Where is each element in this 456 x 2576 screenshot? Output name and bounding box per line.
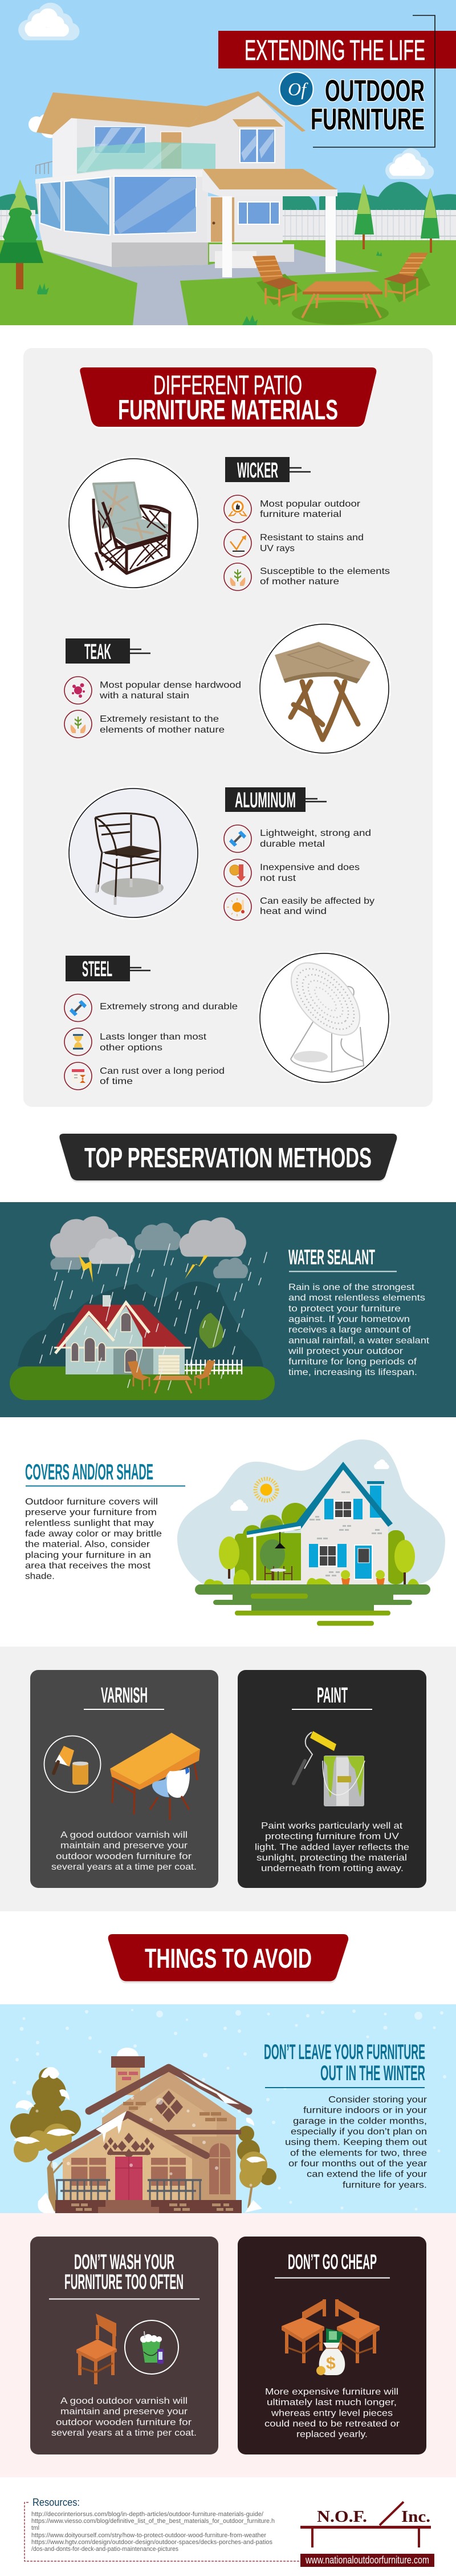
text: cheap: whereas entry level pieces xyxy=(271,2408,393,2418)
bullet: extremely strong xyxy=(64,994,238,1021)
photo: steel chair xyxy=(258,951,391,1085)
illustration: orange desk and chair xyxy=(110,1733,200,1820)
icon: cloud top-left xyxy=(18,3,79,41)
bullet: most popular xyxy=(224,495,361,523)
heading banner: materials: DIFFERENT PATIO xyxy=(153,370,302,400)
background hills and fence xyxy=(0,182,456,241)
text: water sealant body: will protect your outdoor xyxy=(288,1346,404,1356)
material label: aluminum: ALUMINUM xyxy=(235,788,296,812)
text: water sealant body: to protect your furniture xyxy=(288,1304,401,1313)
text: cheap: More expensive furniture will xyxy=(265,2387,398,2397)
card: varnish xyxy=(30,1670,218,1888)
text: winter body: furniture for years. xyxy=(343,2180,427,2190)
bullet: lightweight: durable metal xyxy=(260,839,325,849)
icon: trees xyxy=(0,180,439,325)
text: paint: Paint works particularly well at xyxy=(261,1821,403,1831)
bullet: most popular: furniture material xyxy=(260,509,341,519)
bullet: lasts longer xyxy=(64,1028,207,1056)
text: winter body: of the elements for two, three xyxy=(290,2148,427,2158)
card: paint: PAINT xyxy=(317,1684,348,1708)
bullet: resistant to elements: elements of mother nature xyxy=(100,725,225,735)
illustration: chair xyxy=(76,2314,117,2384)
text: water sealant body: receives a large amount of xyxy=(288,1325,412,1335)
ground and path xyxy=(0,240,456,325)
panel: water sealant xyxy=(0,1202,456,1417)
bullet: inexpensive: Inexpensive and does xyxy=(260,863,360,872)
source links: tml xyxy=(31,2525,39,2531)
section: covers and shade xyxy=(25,1439,445,1626)
icon: hourglass xyxy=(73,1035,83,1049)
illustration: snowy house xyxy=(10,2048,276,2214)
bullet: susceptible: of mother nature xyxy=(260,577,339,587)
snowfall xyxy=(13,2009,446,2210)
icon: sun and thermometer xyxy=(227,898,245,916)
logo: N.O.F. Inc.: Inc. xyxy=(401,2508,430,2526)
illustration: paint can and roller xyxy=(294,1731,365,1806)
icon: hands with sprout xyxy=(71,717,85,733)
text: winter body: furniture indoors or in your xyxy=(303,2106,427,2116)
photo: teak stool xyxy=(258,622,391,755)
icon: hands with sprout xyxy=(230,569,245,586)
text: covers body: relentless sunlight that may xyxy=(25,1518,154,1528)
bullet: susceptible xyxy=(224,563,390,591)
text: varnish: maintain and preserve your xyxy=(60,1841,188,1851)
photo: aluminum chair xyxy=(67,786,200,920)
patio furniture xyxy=(253,253,430,325)
panel: don't leave furniture out in winter xyxy=(0,2004,456,2214)
source links: https://www.hgtv.com/design/outdoor-design/outdoor-spaces/decks-porches-and-patios xyxy=(31,2539,272,2546)
text: covers body: shade. xyxy=(25,1572,55,1582)
bullet: lightweight: Lightweight, strong and xyxy=(260,828,371,838)
source links: http://decorinteriorsus.com/blog/in-depth-articles/outdoor-furniture-materials-guide/ xyxy=(31,2511,264,2518)
heading banner: things to avoid: THINGS TO AVOID xyxy=(145,1944,312,1974)
text: winter body: using them. Keeping them out xyxy=(285,2138,427,2148)
text: water sealant body: furniture for long periods of xyxy=(288,1357,417,1367)
text: wash: maintain and preserve your xyxy=(60,2407,188,2417)
bullet: resistant to elements xyxy=(64,710,225,738)
illustration: chairs and money bag xyxy=(282,2299,380,2375)
bullet: heat and wind: Can easily be affected by xyxy=(260,896,374,906)
text: paint xyxy=(255,1821,409,1874)
source links xyxy=(31,2511,275,2553)
heading banner: materials: FURNITURE MATERIALS xyxy=(118,395,338,426)
text: water sealant body: against. If your hometown xyxy=(288,1315,410,1324)
text: winter body: especially if you don’t plan on xyxy=(291,2127,427,2137)
material label: steel: STEEL xyxy=(82,957,112,981)
text: covers body: area that receives the most xyxy=(25,1561,151,1571)
title badge: Of: Of xyxy=(288,79,308,99)
text: water sealant body: Rain is one of the strongest xyxy=(288,1283,415,1292)
icon: dumbbell xyxy=(70,1000,87,1016)
text: paint: light. The added layer reflects the xyxy=(255,1842,409,1852)
heading banner: things to avoid xyxy=(108,1934,348,1983)
bullet: heat and wind: heat and wind xyxy=(260,907,327,916)
house xyxy=(35,91,337,277)
heading: resources: Resources: xyxy=(32,2497,80,2508)
icon: coin and down arrow xyxy=(230,864,246,881)
text: cheap: ultimately last much longer, xyxy=(267,2398,397,2408)
card: paint xyxy=(238,1670,426,1888)
card: varnish: VARNISH xyxy=(101,1684,148,1708)
heading banner: top preservation methods xyxy=(59,1134,397,1182)
card: don't wash too often xyxy=(30,2237,218,2454)
illustration: house with sun xyxy=(177,1439,445,1626)
icon: bucket in circle xyxy=(125,2320,178,2374)
icon: award xyxy=(229,502,246,516)
title banner xyxy=(218,15,456,147)
material label: teak: TEAK xyxy=(84,640,111,664)
bullet: lasts longer: other options xyxy=(100,1043,162,1053)
heading banner: materials xyxy=(80,367,376,428)
illustration: chairs and money bag: $ xyxy=(326,2354,336,2373)
footer: resources xyxy=(25,2497,300,2561)
text: varnish xyxy=(51,1830,197,1872)
panel: washing and buying cheap xyxy=(0,2213,456,2477)
text: water sealant body: time, increasing its lifespan. xyxy=(288,1368,417,1377)
text: covers body xyxy=(25,1497,162,1582)
bullet: susceptible: Susceptible to the elements xyxy=(260,567,390,576)
text: winter body xyxy=(285,2095,427,2190)
bullet: resistant xyxy=(224,529,364,557)
bullet: can rust xyxy=(64,1062,225,1090)
source links: https://www.doityourself.com/stry/how-to-protect-outdoor-wood-furniture-from-weather xyxy=(31,2532,266,2539)
source links: https://www.viesso.com/blog/definitive_list_of_the_best_materials_for_outdoor_furniture.h xyxy=(31,2518,275,2525)
icon: dumbbell xyxy=(229,831,246,847)
text: wash: outdoor wooden furniture for xyxy=(56,2417,192,2427)
card: don't go cheap xyxy=(238,2237,426,2454)
material label: teak xyxy=(66,638,150,664)
material label: aluminum xyxy=(225,787,327,812)
bullet: resistant: Resistant to stains and xyxy=(260,533,364,543)
icon: brush and can in circle xyxy=(44,1736,100,1793)
text: cheap: replaced yearly. xyxy=(296,2430,368,2440)
text: varnish: outdoor wooden furniture for xyxy=(56,1851,192,1861)
material label: wicker: WICKER xyxy=(237,459,278,483)
bullet: lightweight xyxy=(224,825,371,852)
material label: wicker xyxy=(225,457,311,483)
bullet: inexpensive xyxy=(224,859,360,887)
hero illustration xyxy=(0,0,456,325)
text: wash xyxy=(51,2396,197,2438)
bracket xyxy=(313,15,435,147)
text: winter body: can extend the life of your xyxy=(307,2170,427,2179)
bullet: can rust: of time xyxy=(100,1077,133,1086)
text: wash: A good outdoor varnish will xyxy=(60,2396,188,2406)
text: paint: underneath from rotting away. xyxy=(261,1864,404,1874)
heading: don't leave furniture xyxy=(264,2040,425,2088)
photo: wicker chair xyxy=(67,456,200,590)
text: winter body: or four months out of the year xyxy=(288,2159,427,2169)
text: varnish: A good outdoor varnish will xyxy=(60,1830,188,1840)
logo: N.O.F. Inc.: www.nationaloutdoorfurniture.com xyxy=(305,2554,429,2566)
text: winter body: Consider storing your xyxy=(328,2095,427,2105)
panel: patio furniture materials xyxy=(23,348,433,1107)
bullet: extremely strong: Extremely strong and durable xyxy=(100,1002,238,1012)
text: paint: sunlight, protecting the material xyxy=(256,1853,407,1863)
icon: cloud right xyxy=(385,148,434,179)
icon: check arrow xyxy=(230,535,246,551)
text: cheap xyxy=(264,2387,400,2440)
bullet: dense hardwood xyxy=(64,677,241,704)
bullet: most popular: Most popular outdoor xyxy=(260,499,361,509)
text: covers body: preserve your furniture from xyxy=(25,1508,157,1518)
bullet: can rust: Can rust over a long period xyxy=(100,1066,225,1076)
source links: /dos-and-donts-for-deck-and-patio-maintenance-pictures xyxy=(31,2546,178,2553)
card: don't wash too often: FURNITURE TOO OFTEN xyxy=(64,2270,184,2294)
panel: varnish and paint xyxy=(0,1647,456,1911)
text: wash: several years at a time per coat. xyxy=(51,2428,197,2438)
text: varnish: several years at a time per coat. xyxy=(51,1862,197,1872)
bullet: heat and wind xyxy=(224,893,374,920)
bullet: resistant to elements: Extremely resistant to the xyxy=(100,714,219,724)
text: water sealant body: annual rainfall, a water sealant xyxy=(288,1336,430,1345)
title badge: Of xyxy=(279,72,314,106)
icon: sun xyxy=(255,1479,277,1501)
icon: calendar timer xyxy=(72,1069,85,1083)
icon: cloud behind house xyxy=(28,114,60,138)
text: cheap: could need to be retreated or xyxy=(264,2419,400,2429)
bullet: inexpensive: not rust xyxy=(260,874,296,883)
text: water sealant body xyxy=(288,1283,430,1377)
text: covers body: the material. Also, consider xyxy=(25,1540,150,1550)
logo: N.O.F. Inc.: N.O.F. xyxy=(317,2508,367,2526)
card: don't wash too often: DON’T WASH YOUR xyxy=(74,2250,174,2274)
icon: stain xyxy=(72,684,85,698)
illustration: storm and house xyxy=(10,1216,275,1400)
logo: N.O.F. Inc. xyxy=(300,2502,434,2567)
bullet: resistant: UV rays xyxy=(260,544,295,553)
text: paint: protecting furniture from UV xyxy=(265,1832,399,1842)
text: winter body: garage in the colder months, xyxy=(293,2116,427,2126)
text: covers body: fade away color or may brittle xyxy=(25,1529,162,1539)
section: covers and shade: COVERS AND/OR SHADE xyxy=(25,1460,153,1485)
text: water sealant body: and most relentless elements xyxy=(288,1293,425,1303)
bullet: dense hardwood: Most popular dense hardwood xyxy=(100,680,241,690)
text: covers body: placing your furniture in an xyxy=(25,1550,151,1560)
bullet: dense hardwood: with a natural stain xyxy=(99,691,189,701)
bullet: lasts longer: Lasts longer than most xyxy=(100,1032,207,1042)
text: covers body: Outdoor furniture covers will xyxy=(25,1497,158,1507)
